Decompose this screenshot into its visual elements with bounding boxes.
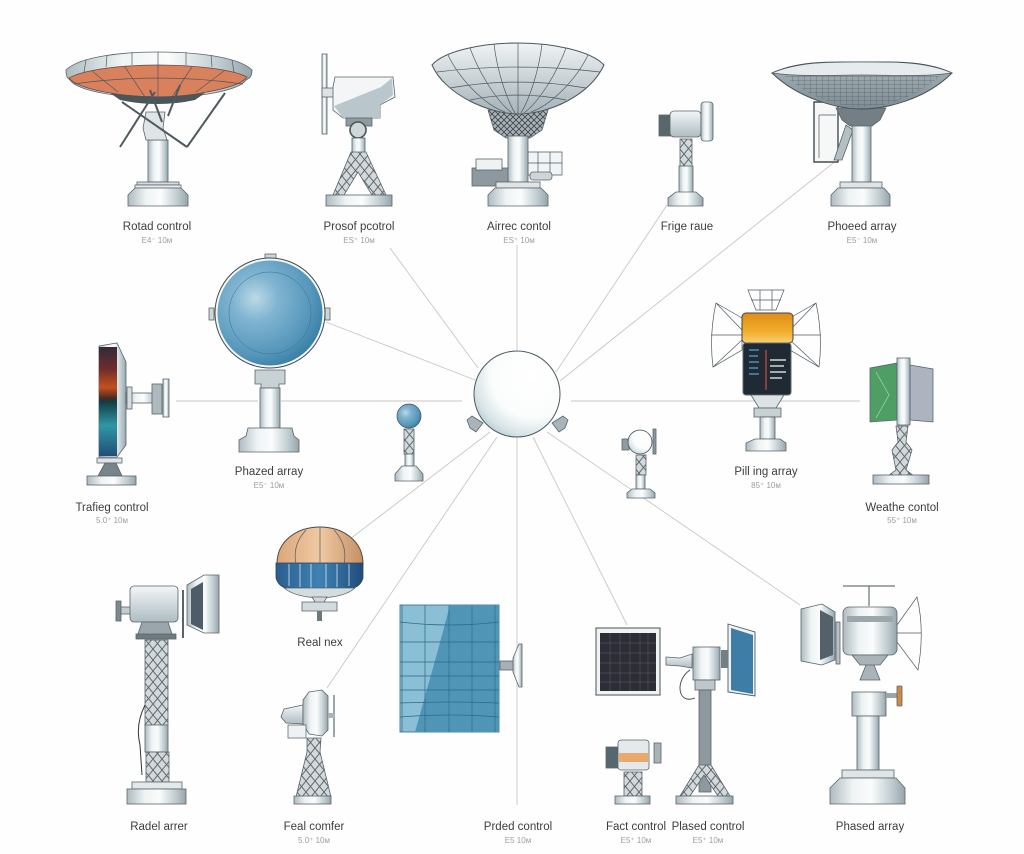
- coil column: [624, 772, 642, 796]
- body: [618, 740, 649, 770]
- label: plased control: Plased control: [672, 821, 744, 833]
- pedestal: [508, 136, 528, 182]
- label: prded control: [484, 821, 552, 845]
- arm: [126, 393, 158, 403]
- sleeve: [145, 725, 168, 752]
- horn: [281, 705, 303, 724]
- front box: [606, 747, 618, 768]
- panel fill: [400, 605, 499, 732]
- orange bowl: [69, 65, 247, 97]
- device: small grey globe: [622, 429, 656, 498]
- mount stub: [500, 661, 514, 670]
- base: [239, 428, 299, 452]
- solar panel: [596, 628, 660, 695]
- tabs: [209, 254, 330, 320]
- shade: [415, 605, 499, 732]
- left bolt: [116, 601, 121, 621]
- device: radome: [276, 527, 363, 621]
- horn: [666, 654, 692, 668]
- control screen: [743, 343, 791, 395]
- base: [627, 489, 655, 498]
- label: proof control: ES⁺ 10м: [343, 236, 375, 245]
- strut frame: [120, 85, 225, 147]
- neck and joint: [346, 118, 372, 126]
- antenna bar: [333, 695, 335, 737]
- cable: [138, 705, 145, 775]
- label: phased array centre left: E5⁻ 10м: [254, 481, 284, 490]
- base: [873, 475, 929, 484]
- device: lattice tower with monitor: [116, 575, 219, 804]
- front box: [659, 115, 671, 136]
- label: rotad control: E4⁻ 10м: [142, 236, 172, 245]
- hub mount stubs: [467, 416, 568, 432]
- label: phased array top right: Phoeed array: [827, 221, 897, 233]
- underside: [284, 588, 355, 598]
- blue glass panel: [400, 605, 522, 732]
- label: traffic control: [75, 502, 149, 525]
- device: camera unit on tripod: [322, 54, 395, 206]
- body: [670, 111, 701, 137]
- device: orange dish: [66, 52, 252, 206]
- mount: [302, 597, 337, 611]
- funnel: [751, 395, 784, 408]
- label: airrec control: Airrec contol: [487, 221, 551, 233]
- device: traffic control panel: [87, 343, 169, 485]
- label: phased array bottom right: Phased array: [836, 821, 904, 833]
- label: rotad control: Rotad control: [123, 221, 191, 233]
- collar: [852, 692, 886, 716]
- lattice mount: [488, 110, 548, 138]
- base: [87, 476, 136, 485]
- column: [404, 429, 414, 454]
- dish upper rim: [772, 62, 952, 76]
- pedestal: [148, 140, 168, 182]
- base: [830, 778, 905, 804]
- device: large grey dish: [432, 43, 604, 206]
- column: [679, 166, 693, 193]
- device: small camera unit: [659, 102, 713, 206]
- base: [668, 192, 703, 206]
- lower equipment: [530, 172, 552, 180]
- side frame: [814, 102, 838, 162]
- device: green and grey panel: [870, 358, 933, 484]
- rim segments: [84, 52, 234, 72]
- head body: [843, 607, 897, 655]
- label: fact control: E5⁺ 10м: [621, 836, 651, 845]
- label: fact control: [606, 821, 666, 845]
- device: lattice tower with horn: [281, 690, 335, 804]
- label: feal comfer: [284, 821, 345, 845]
- label: airrec control: [487, 221, 551, 245]
- label: fact control: Fact control: [606, 821, 666, 833]
- panel: [303, 690, 328, 736]
- label: real nex: Real nex: [297, 637, 343, 649]
- label: traffic control: Trafieg control: [75, 502, 149, 514]
- label: pilling array: Pill ing array: [734, 466, 798, 478]
- bracket: [288, 725, 306, 738]
- green panel: [870, 363, 897, 422]
- dish bowl: [432, 43, 604, 114]
- dark cells: [600, 633, 656, 691]
- colour screen: [99, 347, 117, 456]
- bowl grid: [74, 65, 243, 97]
- dish: [772, 62, 952, 109]
- label: rotad control: [123, 221, 191, 245]
- monitor: [187, 575, 219, 633]
- head: [693, 647, 720, 680]
- dish rim: [66, 52, 252, 98]
- side mounts: [622, 439, 629, 450]
- bracket: [152, 384, 162, 414]
- dish grid: [437, 43, 600, 114]
- column: [260, 388, 280, 428]
- device: large head with monitor and fan: [801, 586, 921, 804]
- base rings: [842, 770, 894, 778]
- dome: [277, 527, 363, 564]
- label: feal comfer: 5.0⁺ 10м: [298, 836, 330, 845]
- mount: [836, 108, 886, 126]
- device: blue sphere: [209, 254, 330, 452]
- support: [97, 458, 122, 463]
- column: [760, 417, 775, 439]
- label: weather control: 55⁺ 10м: [887, 516, 917, 525]
- hub sphere: [474, 351, 560, 437]
- pedestal: [852, 124, 871, 182]
- base: [326, 195, 392, 206]
- back plate: [701, 102, 713, 141]
- cable: [680, 670, 695, 699]
- lower lattice: [146, 752, 169, 782]
- amber top: [742, 313, 793, 343]
- neck: [852, 655, 888, 680]
- side casing: [99, 343, 126, 457]
- label: weather control: [865, 502, 939, 525]
- screen readouts: [749, 350, 786, 390]
- device: slim mast with blue monitor: [666, 624, 755, 804]
- label: weather control: Weathe contol: [865, 502, 939, 514]
- label: pilling array: [734, 466, 798, 490]
- neck: [255, 370, 285, 388]
- base: [132, 782, 182, 789]
- globe: [628, 430, 652, 454]
- base: [831, 188, 890, 206]
- twist support: [888, 426, 914, 476]
- vertical antenna bar: [322, 54, 327, 134]
- label: phased array centre left: Phazed array: [235, 466, 303, 478]
- antenna wings: [711, 290, 821, 367]
- base: [488, 188, 548, 206]
- underside mount: [110, 93, 205, 104]
- left equipment box: [472, 168, 508, 186]
- base: [395, 466, 423, 481]
- label: phased array top right: [827, 221, 897, 245]
- device: small blue globe: [395, 404, 423, 481]
- base rings: [840, 182, 882, 188]
- base rings: [137, 182, 179, 185]
- label: phased array top right: E5⁻ 10м: [847, 236, 877, 245]
- base: [128, 188, 188, 206]
- label: traffic control: 5.0⁺ 10м: [96, 516, 128, 525]
- camera body: [333, 77, 395, 118]
- column: [857, 716, 879, 770]
- label: prded control: Prded control: [484, 821, 552, 833]
- neck: [680, 139, 692, 167]
- sphere: [215, 258, 325, 368]
- legs: [680, 765, 730, 796]
- label: radel arrer: Radel arrer: [130, 821, 188, 833]
- top antenna: [843, 586, 895, 606]
- mast: [699, 690, 711, 792]
- central sphere hub: [467, 351, 568, 437]
- label: plased control: [672, 821, 744, 845]
- label: fage raue: Frige raue: [661, 221, 713, 233]
- connector lines: [176, 160, 860, 805]
- label: airrec control: ES⁺ 10м: [503, 236, 535, 245]
- tripod: [333, 152, 386, 195]
- collar: [754, 408, 781, 417]
- label: plased control: E5⁺ 10м: [693, 836, 723, 845]
- label: pilling array: 85⁺ 10м: [751, 481, 781, 490]
- platform: [136, 634, 176, 639]
- side plate: [654, 743, 661, 763]
- centre pole: [897, 358, 910, 425]
- panel grid: [400, 605, 499, 732]
- base rings: [496, 182, 540, 188]
- label: feal comfer: Feal comfer: [284, 821, 345, 833]
- right equipment grid: [528, 152, 562, 175]
- globe: [397, 404, 421, 428]
- base: [676, 796, 733, 804]
- valve knob: [886, 693, 897, 698]
- base: [615, 796, 650, 804]
- base: [294, 796, 331, 804]
- label: phased array centre left: [235, 466, 303, 490]
- blue band: [276, 563, 363, 588]
- grey panel: [910, 365, 933, 422]
- device: amber control cabinet: [711, 290, 821, 451]
- column: [636, 455, 646, 475]
- orange stripe: [619, 753, 648, 762]
- device: mini orange camera: [606, 740, 661, 804]
- base: [746, 439, 786, 451]
- lattice tower: [296, 738, 331, 797]
- mount bolt: [322, 88, 335, 97]
- upper lattice: [145, 640, 168, 726]
- fan antenna: [897, 597, 921, 670]
- side post: [182, 590, 184, 638]
- frame: [596, 628, 660, 695]
- head body: [130, 586, 178, 622]
- T bracket: [513, 644, 522, 687]
- label: proof control: [324, 221, 394, 245]
- label: proof control: Prosof pcotrol: [324, 221, 394, 233]
- device: dark mesh dish: [772, 62, 952, 206]
- monitor: [728, 624, 755, 696]
- monitor: [801, 604, 835, 665]
- label: prded control: E5 10м: [505, 836, 531, 845]
